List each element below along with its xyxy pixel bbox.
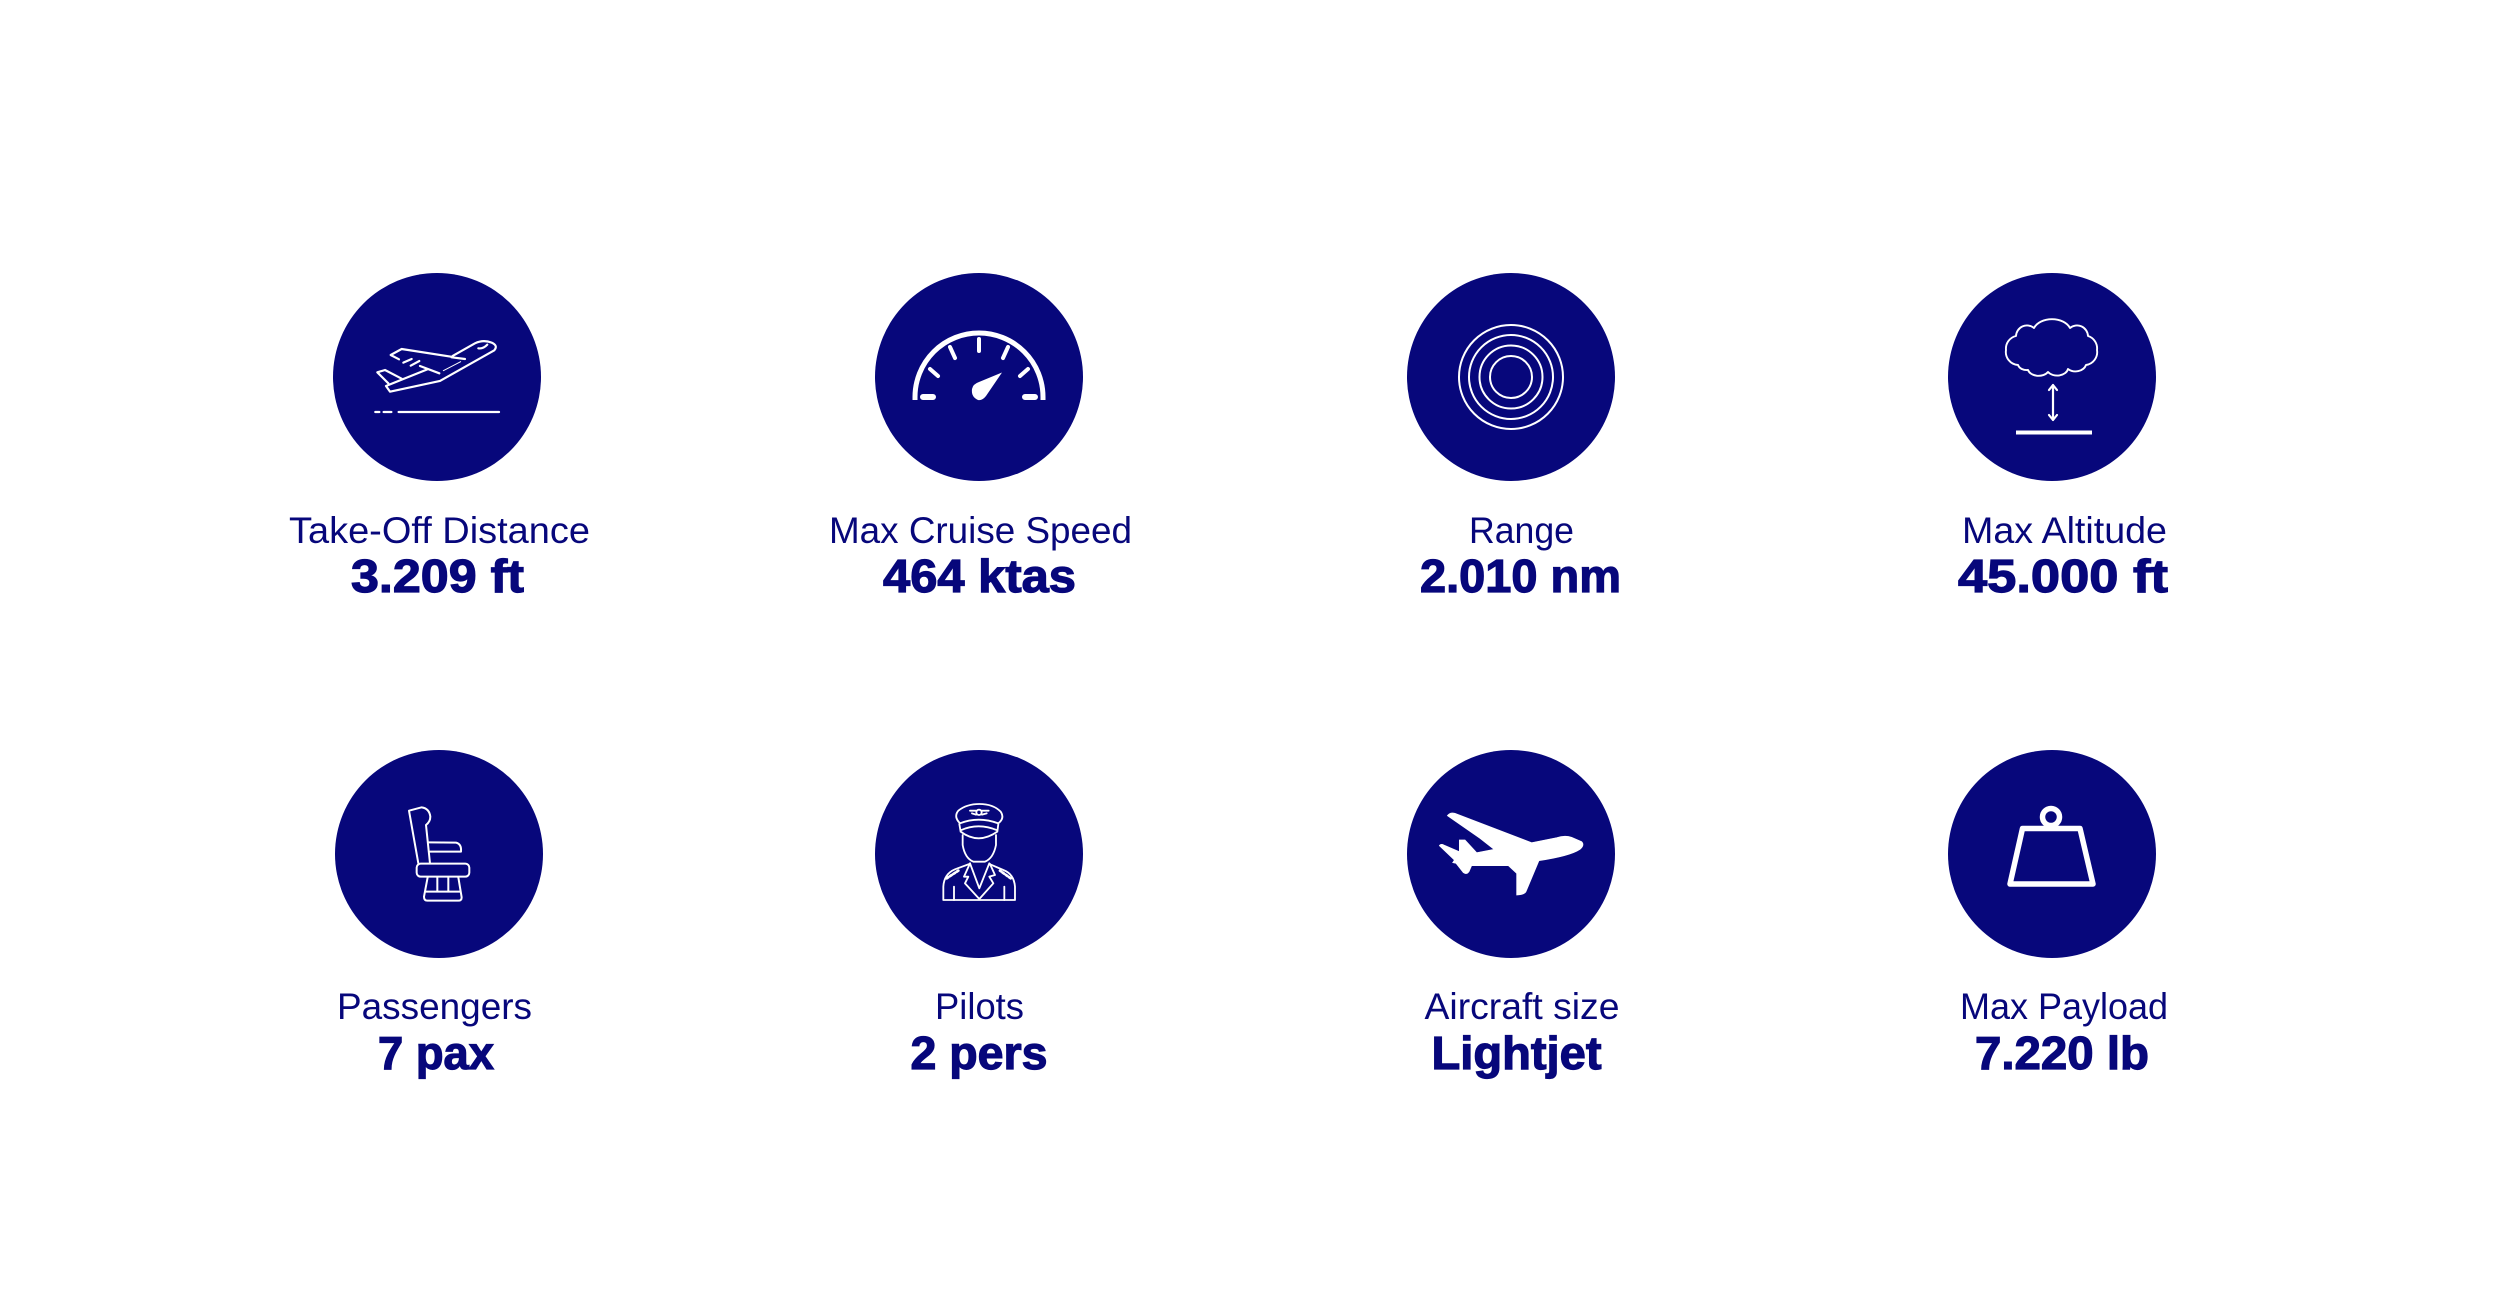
label: Aircraft size [1424,986,1620,1027]
icon: payload weight [1948,750,2156,958]
panel: Max Altitude [1948,273,2168,602]
panel: Passengers [335,750,543,1079]
icon: plane taking off [333,273,541,481]
value: 45.000 ft [1958,550,2168,602]
icon: solid airplane silhouette [1407,750,1615,958]
value: 7 pax [378,1027,494,1079]
panel: Pilots [875,750,1083,1079]
label: Max Cruise Speed [829,510,1132,551]
value: 464 ktas [883,550,1076,602]
panel: Aircraft size [1407,750,1620,1079]
panel: Range [1407,273,1621,602]
panel: Max Cruise Speed [829,273,1132,602]
icon: speedometer gauge [875,273,1083,481]
value: Lightjet [1432,1027,1602,1079]
panel: Take-Off Distance [289,273,590,602]
value: 3.209 ft [351,550,524,602]
value: 2.010 nm [1420,550,1621,602]
label: Max Payload [1960,986,2168,1027]
value: 7.220 lb [1975,1027,2149,1079]
label: Take-Off Distance [289,510,590,551]
label: Range [1469,510,1574,551]
icon: concentric range circles [1407,273,1615,481]
icon: pilot with cap [875,750,1083,958]
label: Max Altitude [1962,510,2167,551]
panel: Max Payload [1948,750,2168,1079]
label: Pilots [935,986,1024,1027]
icon: passenger seat [335,750,543,958]
label: Passengers [337,986,532,1027]
value: 2 pers [910,1027,1048,1079]
icon: cloud above ground with altitude arrow [1948,273,2156,481]
